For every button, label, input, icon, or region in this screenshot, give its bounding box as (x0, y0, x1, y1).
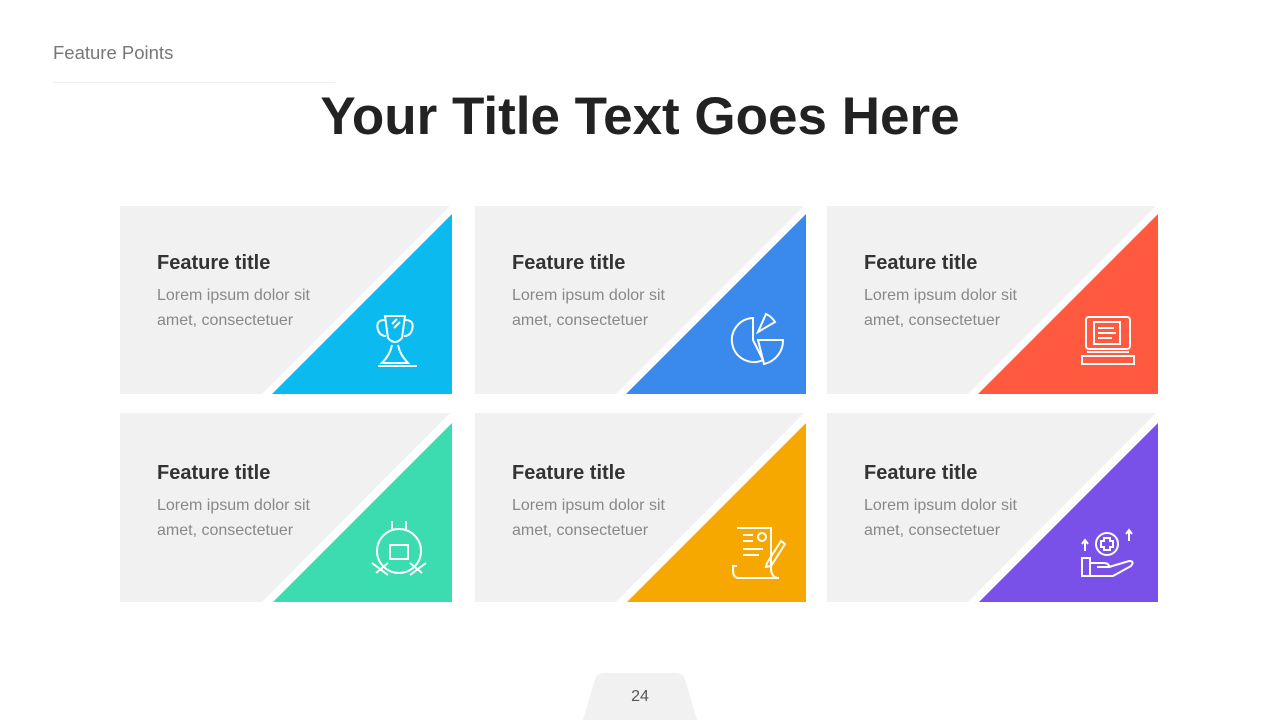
text: Feature title (512, 252, 625, 274)
text: Feature title (864, 462, 977, 484)
icon: teamwork hands (372, 521, 426, 575)
card 6: Lorem ipsum dolor sit (864, 497, 1017, 514)
card 2: Lorem ipsum dolor sit (512, 287, 665, 304)
card 6 (827, 413, 1158, 602)
card 6: amet, consectetuer (864, 522, 1000, 539)
text: Feature title (157, 252, 270, 274)
icon: health care hand (1082, 530, 1133, 576)
card 2: amet, consectetuer (512, 312, 648, 329)
header label: Feature Points (53, 42, 173, 63)
card 5: Lorem ipsum dolor sit (512, 497, 665, 514)
icon: laptop document (1082, 317, 1134, 364)
page number tab: 24 (631, 688, 649, 705)
card 3 (827, 206, 1158, 394)
card 5: amet, consectetuer (512, 522, 648, 539)
card 5 (475, 413, 806, 602)
card 1: Lorem ipsum dolor sit (157, 287, 310, 304)
icon: contract (733, 528, 785, 578)
card 3: amet, consectetuer (864, 312, 1000, 329)
text: Feature title (864, 252, 977, 274)
card 4: Lorem ipsum dolor sit (157, 497, 310, 514)
card 1 (120, 206, 452, 394)
card 4: amet, consectetuer (157, 522, 293, 539)
card 2 (475, 206, 806, 394)
card 3: Lorem ipsum dolor sit (864, 287, 1017, 304)
card 4 (120, 413, 452, 602)
title: Your Title Text Goes Here (320, 87, 960, 146)
icon: trophy (377, 316, 417, 366)
page number tab (583, 673, 697, 720)
text: Feature title (157, 462, 270, 484)
card 1: amet, consectetuer (157, 312, 293, 329)
icon: pie chart (732, 314, 783, 364)
text: Feature title (512, 462, 625, 484)
